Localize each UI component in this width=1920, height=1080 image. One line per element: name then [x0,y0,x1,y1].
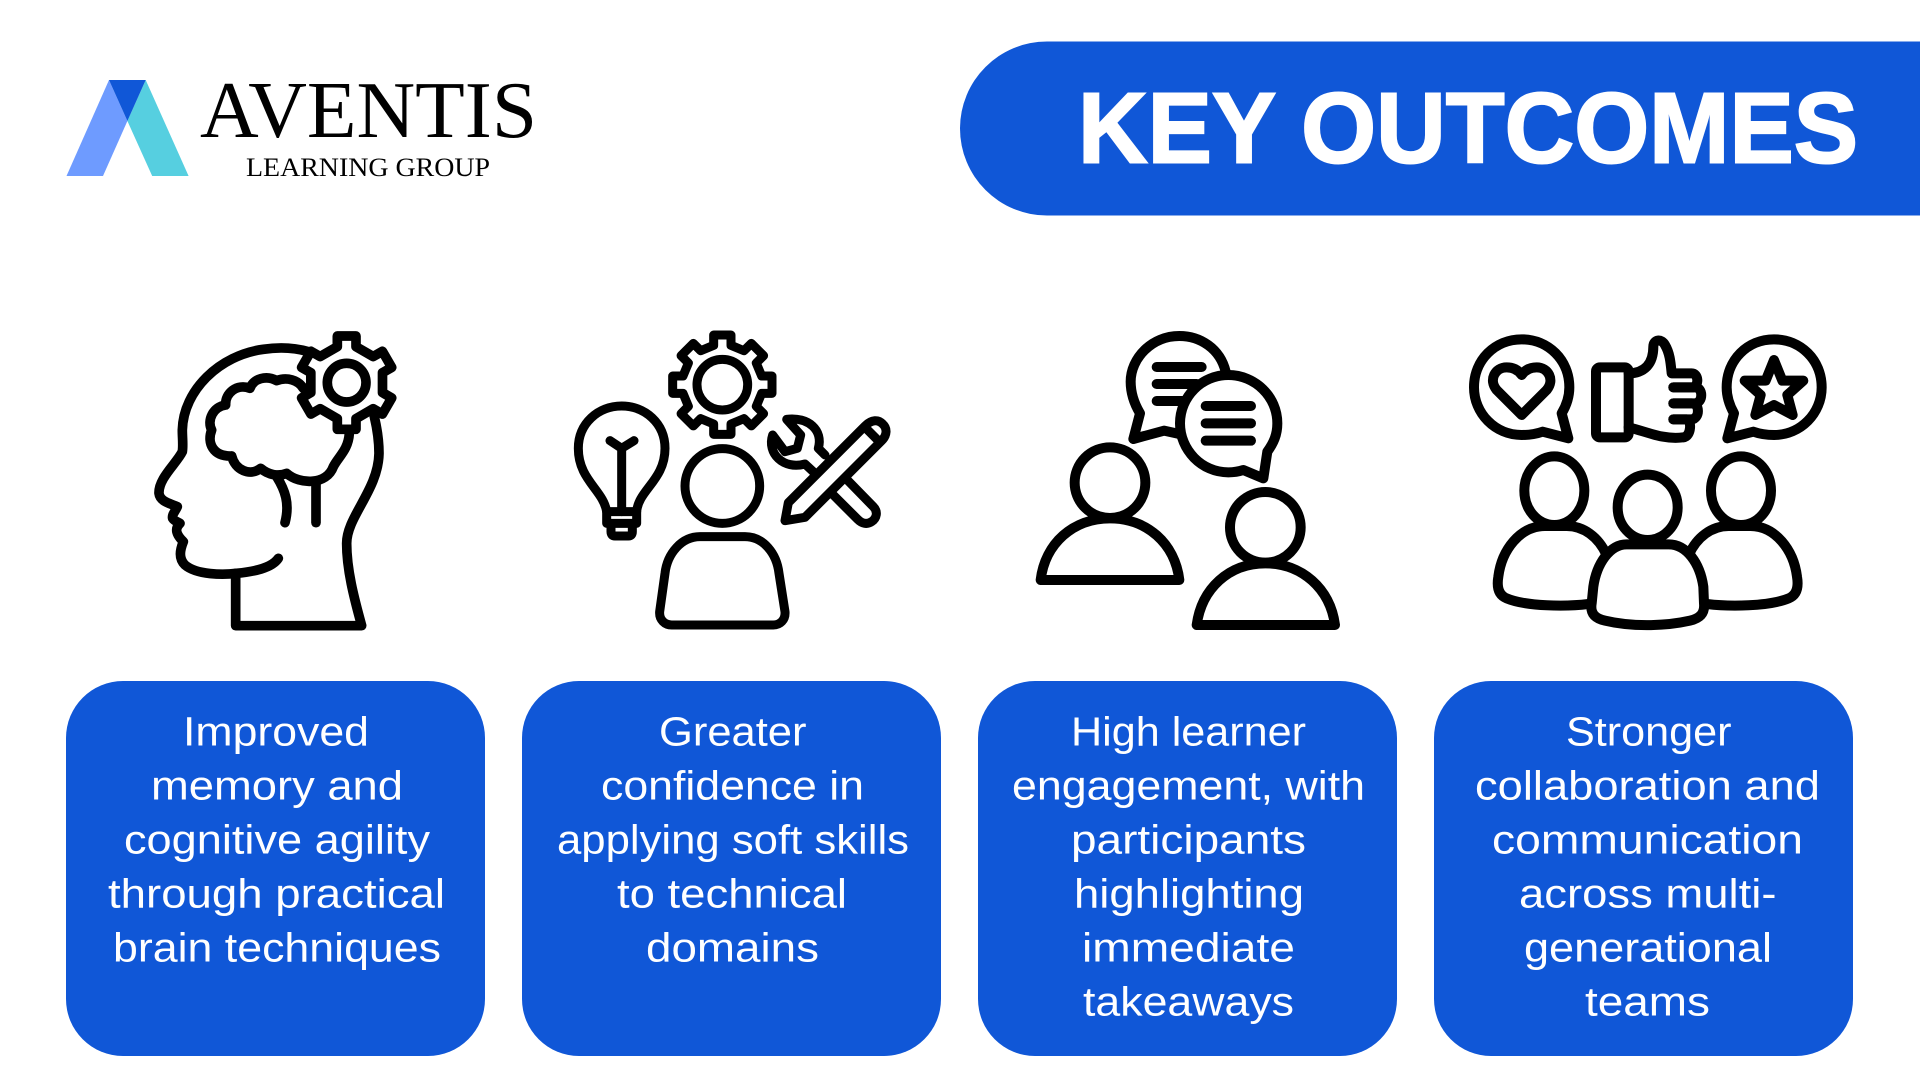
card text [1012,708,1365,1024]
icon: person with gear, bulb and tools [578,335,886,625]
card text: highlighting [1074,870,1304,916]
card text: engagement, with [1012,762,1365,808]
light bulb [578,406,665,536]
person [660,449,785,625]
left team member [1498,456,1607,606]
card: collaboration and communication [1434,681,1853,1056]
card text: High learner [1071,708,1306,754]
card text: confidence in [601,762,864,808]
card text: Stronger [1566,708,1732,754]
card text: cognitive agility [124,816,431,862]
card text: participants [1071,816,1306,862]
card text [557,708,909,970]
card text: collaboration and [1475,762,1820,808]
thumbs up [1596,341,1701,438]
card text: through practical [108,870,445,916]
star bubble [1727,339,1822,438]
right team member [1689,456,1798,606]
title banner [960,42,1920,216]
gear [673,335,772,434]
banner pill [960,42,1920,216]
card text: brain techniques [113,924,441,970]
card text: takeaways [1083,978,1294,1024]
center team member [1591,475,1704,625]
card text: Greater [659,708,806,754]
icon: two people in conversation [1041,336,1335,625]
icon: head with brain and gear [159,336,392,626]
left person [1041,447,1179,580]
card: learner engagement [978,681,1397,1056]
card text: to technical [617,870,847,916]
card text [1475,708,1820,1024]
logo tagline: LEARNING GROUP [246,153,490,182]
card text [108,708,445,970]
card background [66,681,485,1056]
card text: generational [1524,924,1772,970]
card text: teams [1585,978,1710,1024]
card text: across multi- [1519,870,1776,916]
back speech bubble [1131,336,1226,439]
card text: Improved [183,708,369,754]
card: confidence in soft skills [522,681,941,1056]
heart bubble [1474,339,1569,438]
card text: domains [646,924,819,970]
card text: communication [1492,816,1803,862]
icon: team with reactions [1474,339,1822,625]
card text: memory and [151,762,403,808]
right person [1197,492,1335,625]
card text: immediate [1082,924,1295,970]
card background [522,681,941,1056]
logo: Aventis Learning Group [66,65,537,182]
card text: applying soft skills [557,816,909,862]
card: memory and cognitive agility [66,681,485,1056]
logo wordmark: AVENTIS [200,65,537,155]
card background [1434,681,1853,1056]
logo mark [66,80,189,176]
front speech bubble [1180,375,1277,478]
wrench and pencil [771,419,886,523]
title text: KEY OUTCOMES [1078,72,1858,184]
card background [978,681,1397,1056]
